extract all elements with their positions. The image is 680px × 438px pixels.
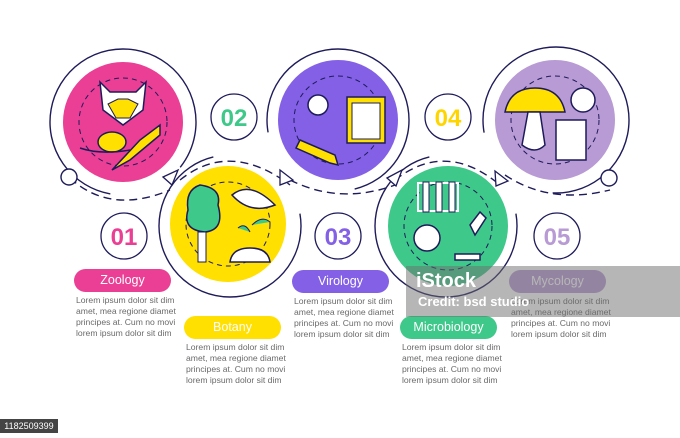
text: zoology: Lorem ipsum dolor sit dim amet, mea regione diamet principes at. Cum no movi lorem ipsum dolor sit dim xyxy=(76,295,176,338)
watermark: Credit: bsd studio xyxy=(418,294,529,309)
circle 5 mycology xyxy=(495,60,615,180)
number badges xyxy=(101,94,580,259)
pill: Mycology: Mycology xyxy=(531,274,584,288)
number badges: 03 xyxy=(325,224,351,251)
number badges: 01 xyxy=(111,224,137,251)
text: microbiology: Lorem ipsum dolor sit dim amet, mea regione diamet principes at. Cum no movi lorem ipsum dolor sit dim xyxy=(402,342,502,385)
text: botany: Lorem ipsum dolor sit dim amet, mea regione diamet principes at. Cum no movi lorem ipsum dolor sit dim xyxy=(186,342,286,385)
watermark: iStock xyxy=(416,270,476,292)
text: mycology: Lorem ipsum dolor sit dim amet, mea regione diamet principes at. Cum no movi lorem ipsum dolor sit dim xyxy=(511,296,611,339)
pill: Mycology xyxy=(509,270,606,293)
number badges: 05 xyxy=(544,224,570,251)
pill: Virology: Virology xyxy=(318,274,363,288)
watermark xyxy=(406,266,680,317)
number badges: 02 xyxy=(221,105,247,132)
circle 2 botany xyxy=(170,166,286,282)
pill: Zoology: Zoology xyxy=(100,273,145,287)
image id xyxy=(0,419,58,433)
pill: Zoology xyxy=(74,269,171,292)
pill: Botany: Botany xyxy=(213,320,252,334)
image id: 1182509399 xyxy=(4,421,54,431)
pill: Microbiology xyxy=(400,316,497,339)
text: virology: Lorem ipsum dolor sit dim amet, mea regione diamet principes at. Cum no movi lorem ipsum dolor sit dim xyxy=(294,296,394,339)
pill: Virology xyxy=(292,270,389,293)
pill: Microbiology: Microbiology xyxy=(413,320,484,334)
arrows xyxy=(163,170,508,186)
number badges: 04 xyxy=(435,105,462,132)
pill: Botany xyxy=(184,316,281,339)
circle 4 microbiology xyxy=(388,166,508,286)
circle 1 zoology xyxy=(63,62,183,182)
circle 3 virology xyxy=(278,60,398,180)
